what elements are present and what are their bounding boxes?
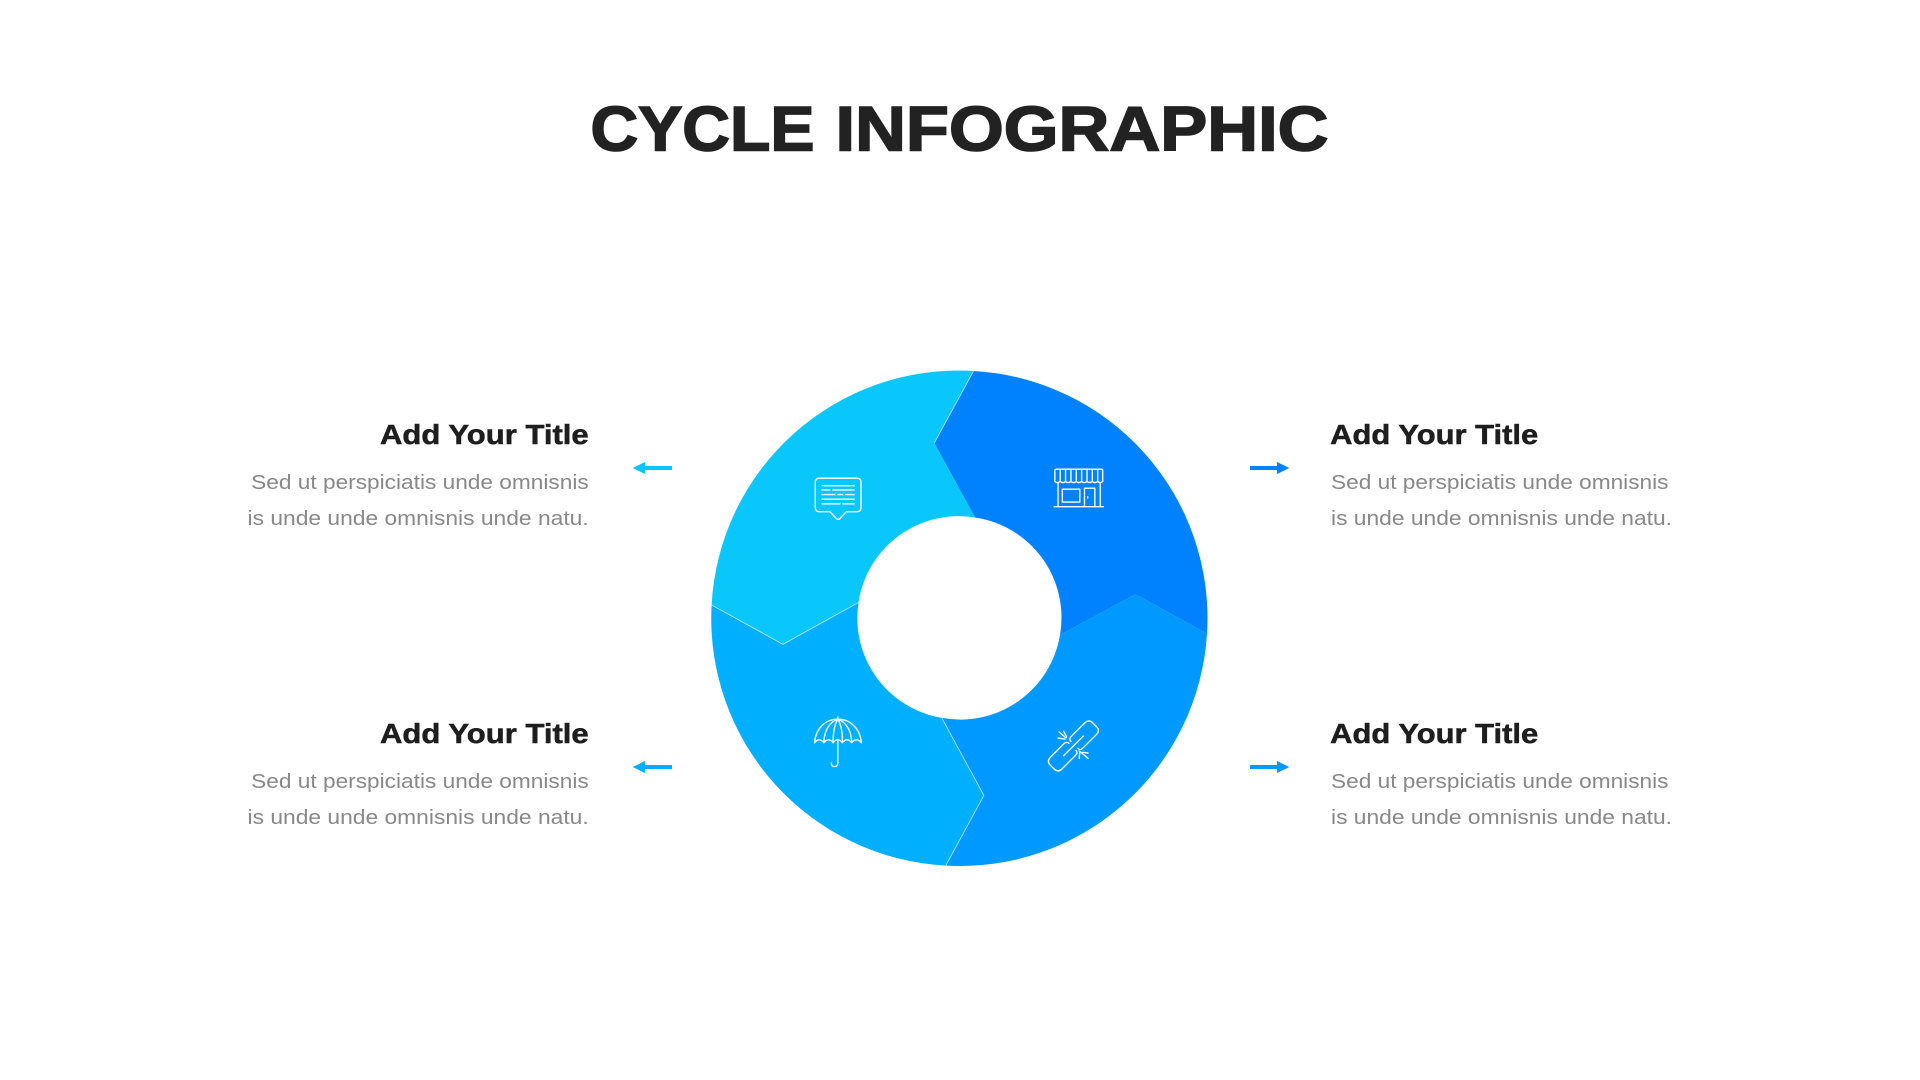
arrow: upper right <box>1250 462 1289 474</box>
segment: upper left <box>712 371 975 644</box>
segment: upper right <box>934 371 1207 635</box>
text block: lower right: Sed ut perspiciatis unde omnisnis <box>1331 770 1668 793</box>
text block: upper right: is unde unde omnisnis unde natu. <box>1331 507 1672 530</box>
segment: lower right <box>942 594 1207 866</box>
title: INFOGRAPHIC <box>836 94 1328 164</box>
title: CYCLE <box>590 94 814 164</box>
text block: lower left: is unde unde omnisnis unde natu. <box>248 806 589 829</box>
icon: speech bubble <box>815 478 861 519</box>
cycle ring diagram <box>711 371 1207 866</box>
icon: store <box>1054 469 1103 507</box>
text block: lower left <box>248 718 589 829</box>
icon: umbrella <box>815 717 861 767</box>
text block: lower right: is unde unde omnisnis unde natu. <box>1331 806 1672 829</box>
text block: lower right <box>1330 718 1672 829</box>
text block: lower left: Sed ut perspiciatis unde omnisnis <box>251 770 589 793</box>
text block: upper right <box>1330 419 1672 530</box>
arrow: lower right <box>1250 761 1289 773</box>
icon: broken link <box>1046 719 1100 773</box>
text block: upper left: Sed ut perspiciatis unde omnisnis <box>251 471 589 494</box>
text block: upper left: Add Your Title <box>380 419 589 450</box>
text block: upper left: is unde unde omnisnis unde natu. <box>248 507 589 530</box>
title <box>590 94 1328 164</box>
text block: upper right: Add Your Title <box>1330 419 1538 450</box>
text block: upper left <box>248 419 589 530</box>
arrow: upper left <box>633 462 672 474</box>
segment: lower left <box>711 602 984 866</box>
segment separators <box>712 371 984 866</box>
text block: lower left: Add Your Title <box>380 718 589 749</box>
arrow: lower left <box>633 761 672 773</box>
text block: upper right: Sed ut perspiciatis unde omnisnis <box>1331 471 1668 494</box>
text block: lower right: Add Your Title <box>1330 718 1538 749</box>
